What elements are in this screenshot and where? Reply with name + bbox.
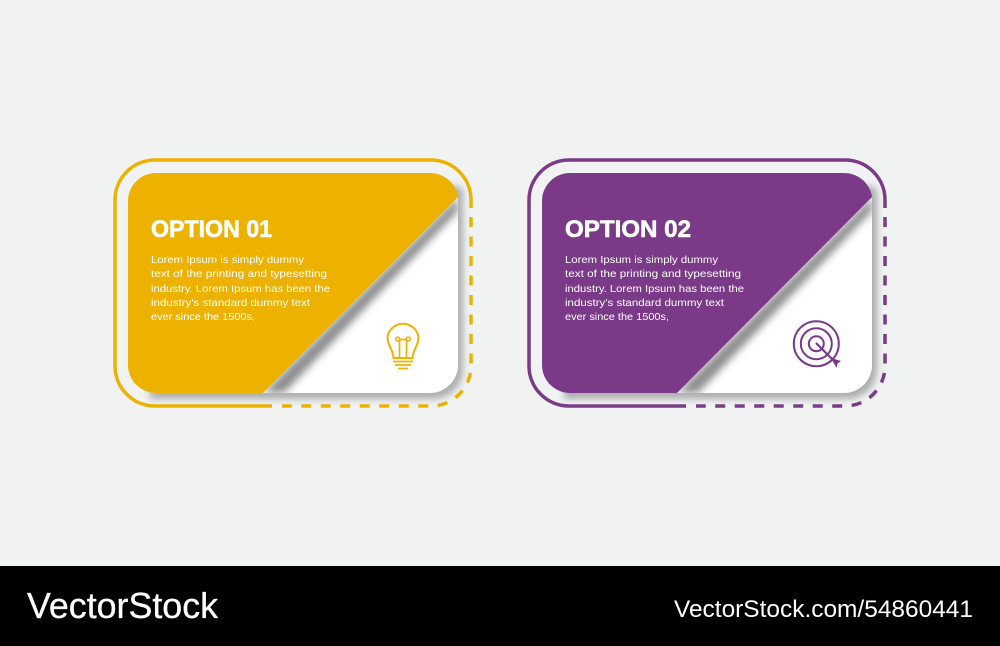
- footer bar: [0, 566, 1000, 646]
- gold fold: [128, 173, 458, 393]
- body text: industry. Lorem Ipsum has been the: [151, 283, 330, 295]
- body text: ever since the 1500s,: [151, 311, 255, 323]
- border: solid and dashed outline: [529, 160, 885, 406]
- purple fold: [542, 173, 872, 393]
- border: solid and dashed outline: [115, 160, 471, 406]
- footer image id: VectorStock.com/54860441: [674, 596, 973, 623]
- fold shadow: [677, 197, 872, 393]
- body text: text of the printing and typesetting: [151, 268, 327, 280]
- body text: Lorem Ipsum is simply dummy: [565, 254, 719, 266]
- panel: option 01: [115, 160, 471, 406]
- body text: Lorem Ipsum is simply dummy: [151, 254, 305, 266]
- body text: industry's standard dummy text: [151, 297, 310, 309]
- body text: text of the printing and typesetting: [565, 268, 741, 280]
- fold shadow: [263, 197, 458, 393]
- body text: [565, 254, 744, 323]
- body text: industry. Lorem Ipsum has been the: [565, 283, 744, 295]
- body text: ever since the 1500s,: [565, 311, 669, 323]
- body text: industry's standard dummy text: [565, 297, 724, 309]
- white card: [128, 173, 458, 393]
- footer logo wordmark: VectorStock: [27, 585, 219, 626]
- heading: OPTION 02: [565, 216, 691, 243]
- card shadow: [564, 186, 877, 399]
- icon: light bulb: [388, 324, 418, 368]
- white card: [542, 173, 872, 393]
- body text: [151, 254, 330, 323]
- icon: target with arrow: [794, 321, 841, 368]
- panel: option 02: [529, 160, 885, 406]
- heading: OPTION 01: [151, 216, 272, 243]
- card shadow: [150, 186, 463, 399]
